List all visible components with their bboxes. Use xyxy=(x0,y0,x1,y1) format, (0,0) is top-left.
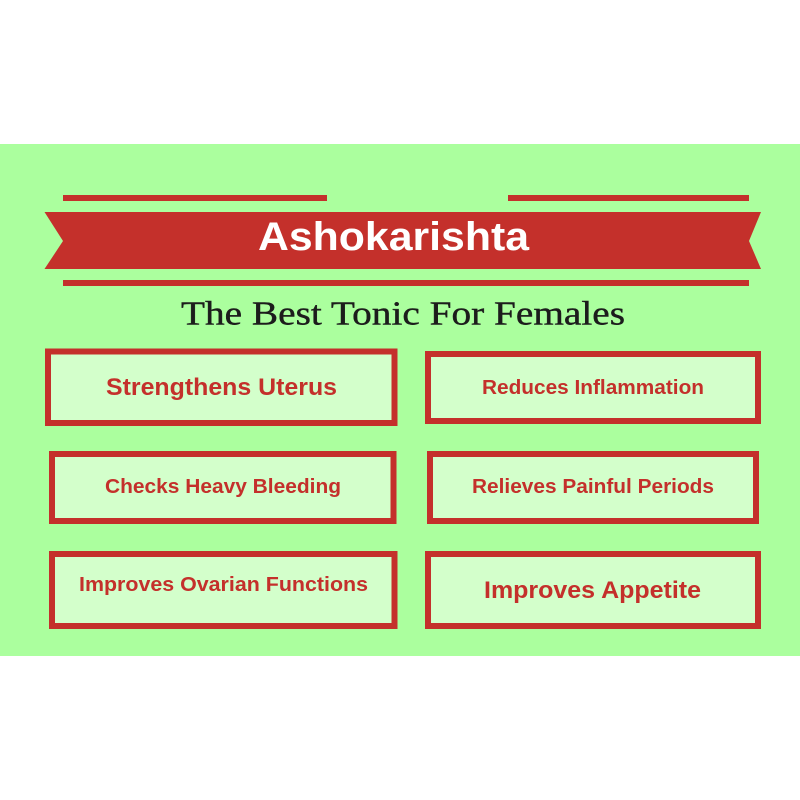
bottom rule xyxy=(63,280,749,286)
box: Reduces Inflammation xyxy=(428,354,758,421)
box: Checks Heavy Bleeding xyxy=(52,454,394,521)
box: Strengthens Uterus xyxy=(48,352,394,423)
top right rule xyxy=(508,195,749,201)
panel: green background xyxy=(0,144,800,656)
box: Strengthens Uterus: Strengthens Uterus xyxy=(106,374,337,401)
box: Relieves Painful Periods: Relieves Painful Periods xyxy=(472,475,714,498)
ribbon banner xyxy=(44,212,761,269)
top left rule xyxy=(63,195,327,201)
box: Improves Appetite xyxy=(428,554,758,626)
box: Improves Ovarian Functions: Improves Ovarian Functions xyxy=(79,573,368,596)
box: Reduces Inflammation: Reduces Inflammation xyxy=(482,376,704,399)
box: Checks Heavy Bleeding: Checks Heavy Bleeding xyxy=(105,475,341,498)
box: Relieves Painful Periods xyxy=(430,454,756,521)
box: Improves Ovarian Functions xyxy=(52,554,394,626)
title: Ashokarishta xyxy=(258,215,530,259)
box: Improves Appetite: Improves Appetite xyxy=(484,577,701,604)
subtitle: The Best Tonic For Females xyxy=(181,296,625,332)
